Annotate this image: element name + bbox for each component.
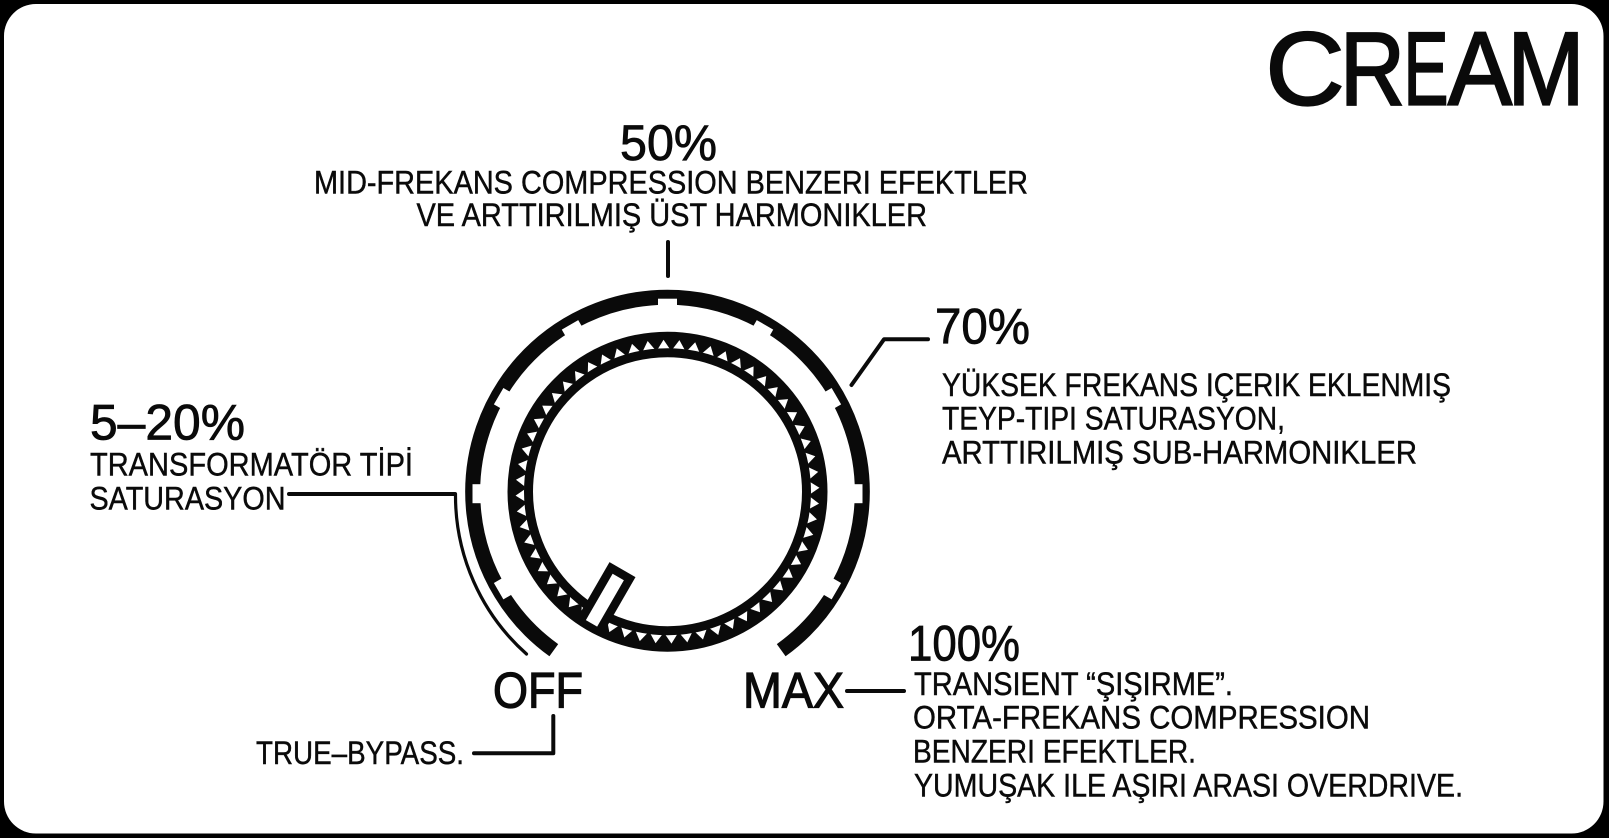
arrow: 70% leader line bbox=[852, 339, 928, 385]
title: CREAM logo: C bbox=[1266, 12, 1344, 128]
text block: 100% description: BENZERI EFEKTLER. bbox=[913, 734, 1196, 770]
arrow: OFF leader line bbox=[474, 716, 553, 753]
text block: 100% description: YUMUŞAK ILE AŞIRI ARASI OVERDRIVE. bbox=[914, 768, 1463, 804]
text block: 100% description: TRANSIENT “ŞIŞIRME”. bbox=[914, 666, 1233, 702]
text block: 70% description bbox=[942, 367, 1451, 470]
text block: 50% description: VE ARTTIRILMIŞ ÜST HARMONIKLER bbox=[416, 197, 927, 233]
text block: TRUE-BYPASS: TRUE–BYPASS. bbox=[256, 735, 464, 771]
title: CREAM logo: R bbox=[1340, 12, 1405, 128]
serrated knob edge bbox=[498, 322, 837, 661]
callout: true bypass bbox=[256, 716, 553, 771]
heading: 50%: 50% bbox=[620, 115, 717, 171]
text block: 5-20% description: SATURASYON bbox=[90, 480, 286, 516]
label: OFF: OFF bbox=[493, 662, 583, 718]
outer scale ring bbox=[472, 297, 862, 650]
text block: 70% description: TEYP-TIPI SATURASYON, bbox=[942, 400, 1285, 436]
text block: 50% description bbox=[314, 164, 1028, 233]
text block: 70% description: ARTTIRILMIŞ SUB-HARMONIKLER bbox=[942, 434, 1417, 470]
knob pointer bbox=[576, 562, 635, 636]
title: CREAM logo: A bbox=[1448, 12, 1513, 128]
text block: 5-20% description: TRANSFORMATÖR TİPİ bbox=[90, 446, 413, 482]
callout: 50% bbox=[314, 115, 1028, 276]
heading: 100%: 100% bbox=[908, 616, 1020, 672]
callout: 70% bbox=[852, 298, 1451, 470]
text block: 50% description: MID-FREKANS COMPRESSION BENZERI EFEKTLER bbox=[314, 164, 1028, 200]
title: CREAM logo: M bbox=[1508, 12, 1584, 128]
knob dial bbox=[472, 297, 862, 661]
arrow: MAX leader line bbox=[847, 689, 904, 693]
text block: 100% description bbox=[913, 666, 1463, 804]
arrow: 5-20% leader line bbox=[289, 494, 526, 654]
text block: 70% description: YÜKSEK FREKANS IÇERIK EKLENMIŞ bbox=[942, 367, 1451, 403]
heading: 70%: 70% bbox=[935, 298, 1030, 354]
callout: 5-20% bbox=[90, 394, 526, 654]
title: CREAM logo: E bbox=[1404, 12, 1448, 128]
label: MAX: MAX bbox=[743, 662, 844, 718]
arrow: 50% leader line bbox=[666, 242, 670, 276]
callout: 100% bbox=[847, 616, 1463, 804]
text block: 100% description: ORTA-FREKANS COMPRESSION bbox=[913, 700, 1370, 736]
heading: 5-20%: 5–20% bbox=[90, 394, 245, 450]
text block: 5-20% description bbox=[90, 446, 413, 516]
